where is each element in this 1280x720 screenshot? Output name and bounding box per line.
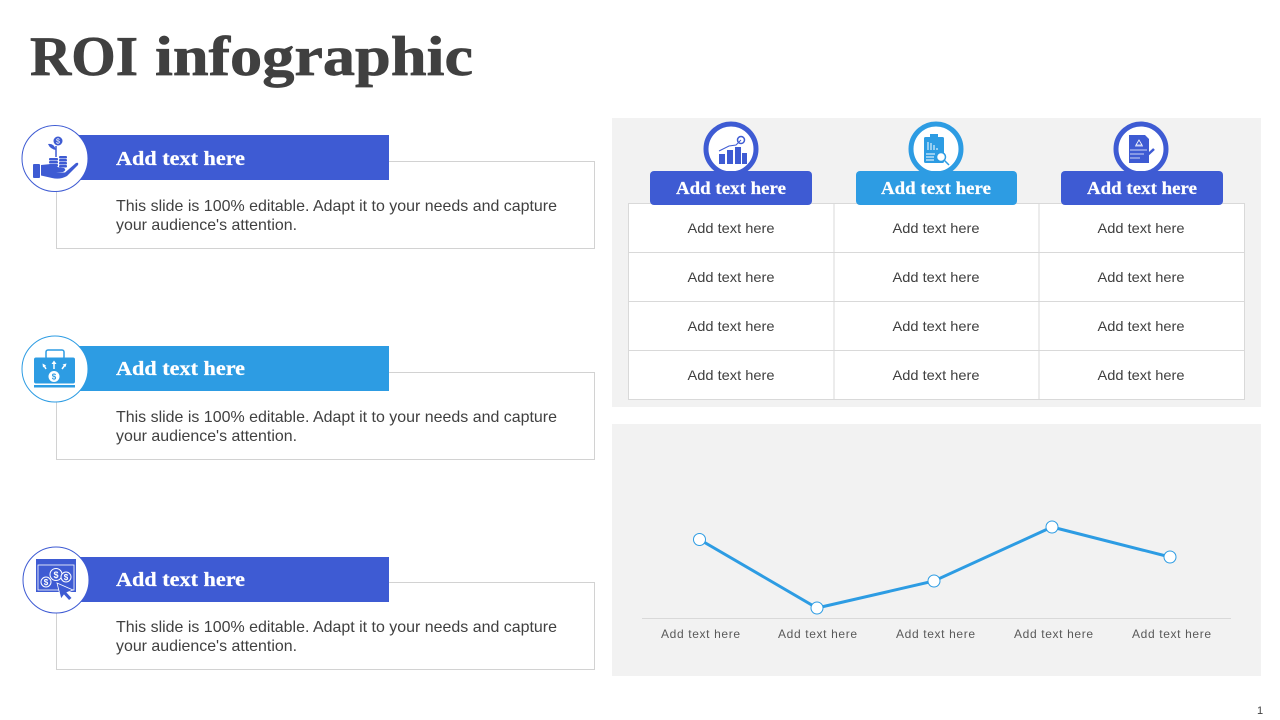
description 3: This slide is 100% editable. Adapt it to your needs and capture: [116, 619, 557, 636]
axis labels: Add text here: [778, 627, 857, 641]
table grid: [628, 204, 1245, 400]
axis labels: Add text here: [661, 627, 740, 641]
description 1: your audience's attention.: [116, 217, 297, 234]
heading 1: Add text here: [116, 148, 245, 170]
table cells: Add text here: [688, 367, 775, 383]
panel: item 3: [23, 547, 594, 670]
axis labels: Add text here: [1132, 627, 1211, 641]
table cells: [688, 220, 1185, 383]
icon: browser with coins and cursor: $: [44, 578, 49, 587]
description 3: your audience's attention.: [116, 638, 297, 655]
icon: document with pen: [1116, 124, 1166, 174]
header 3: [1061, 171, 1223, 205]
title: infographic: [155, 26, 473, 88]
heading 2: Add text here: [116, 358, 245, 380]
header 1: [650, 171, 812, 205]
header 2: Add text here: [881, 178, 991, 198]
panel: item 1: [22, 126, 594, 248]
axis labels: [661, 627, 1211, 641]
icon: hand with coins and plant: $: [56, 138, 60, 146]
axis labels: Add text here: [1014, 627, 1093, 641]
table cells: Add text here: [688, 269, 775, 285]
data points: [694, 521, 1176, 614]
text box 2: [56, 372, 594, 460]
icon: briefcase with dollar: $: [52, 372, 57, 382]
table cells: Add text here: [1098, 367, 1185, 383]
icon: browser with coins and cursor: [23, 547, 89, 613]
table cells: Add text here: [688, 318, 775, 334]
header 1: Add text here: [676, 178, 786, 198]
panel: line chart: [612, 424, 1261, 676]
icon: clipboard with magnifier: [911, 124, 961, 174]
slide number: 1: [1257, 705, 1263, 717]
icon: briefcase with dollar: [22, 336, 88, 402]
banner 2: [78, 346, 389, 391]
table cells: Add text here: [1098, 269, 1185, 285]
table cells: Add text here: [688, 220, 775, 236]
description 2: This slide is 100% editable. Adapt it to your needs and capture: [116, 409, 557, 426]
heading 3: Add text here: [116, 569, 245, 591]
header 3: Add text here: [1087, 178, 1197, 198]
icon: hand with coins and plant: [22, 126, 88, 192]
text box 3: [56, 582, 594, 670]
banner 3: [78, 557, 389, 602]
icon: growth chart: [706, 124, 756, 174]
banner 1: [78, 135, 389, 180]
panel: comparison table: [612, 118, 1261, 407]
header 2: [856, 171, 1017, 205]
title: ROI: [30, 26, 138, 88]
table cells: Add text here: [892, 367, 980, 383]
table cells: Add text here: [1098, 220, 1185, 236]
icon: browser with coins and cursor: $: [53, 570, 59, 580]
table cells: Add text here: [1098, 318, 1185, 334]
text box 1: [56, 162, 594, 248]
table cells: Add text here: [892, 220, 980, 236]
table cells: Add text here: [892, 318, 980, 334]
line series: [700, 527, 1170, 608]
table cells: Add text here: [892, 269, 980, 285]
icon: browser with coins and cursor: $: [64, 573, 69, 582]
description 1: This slide is 100% editable. Adapt it to your needs and capture: [116, 198, 557, 215]
description 2: your audience's attention.: [116, 428, 297, 445]
axis labels: Add text here: [896, 627, 975, 641]
panel: item 2: [22, 336, 594, 460]
